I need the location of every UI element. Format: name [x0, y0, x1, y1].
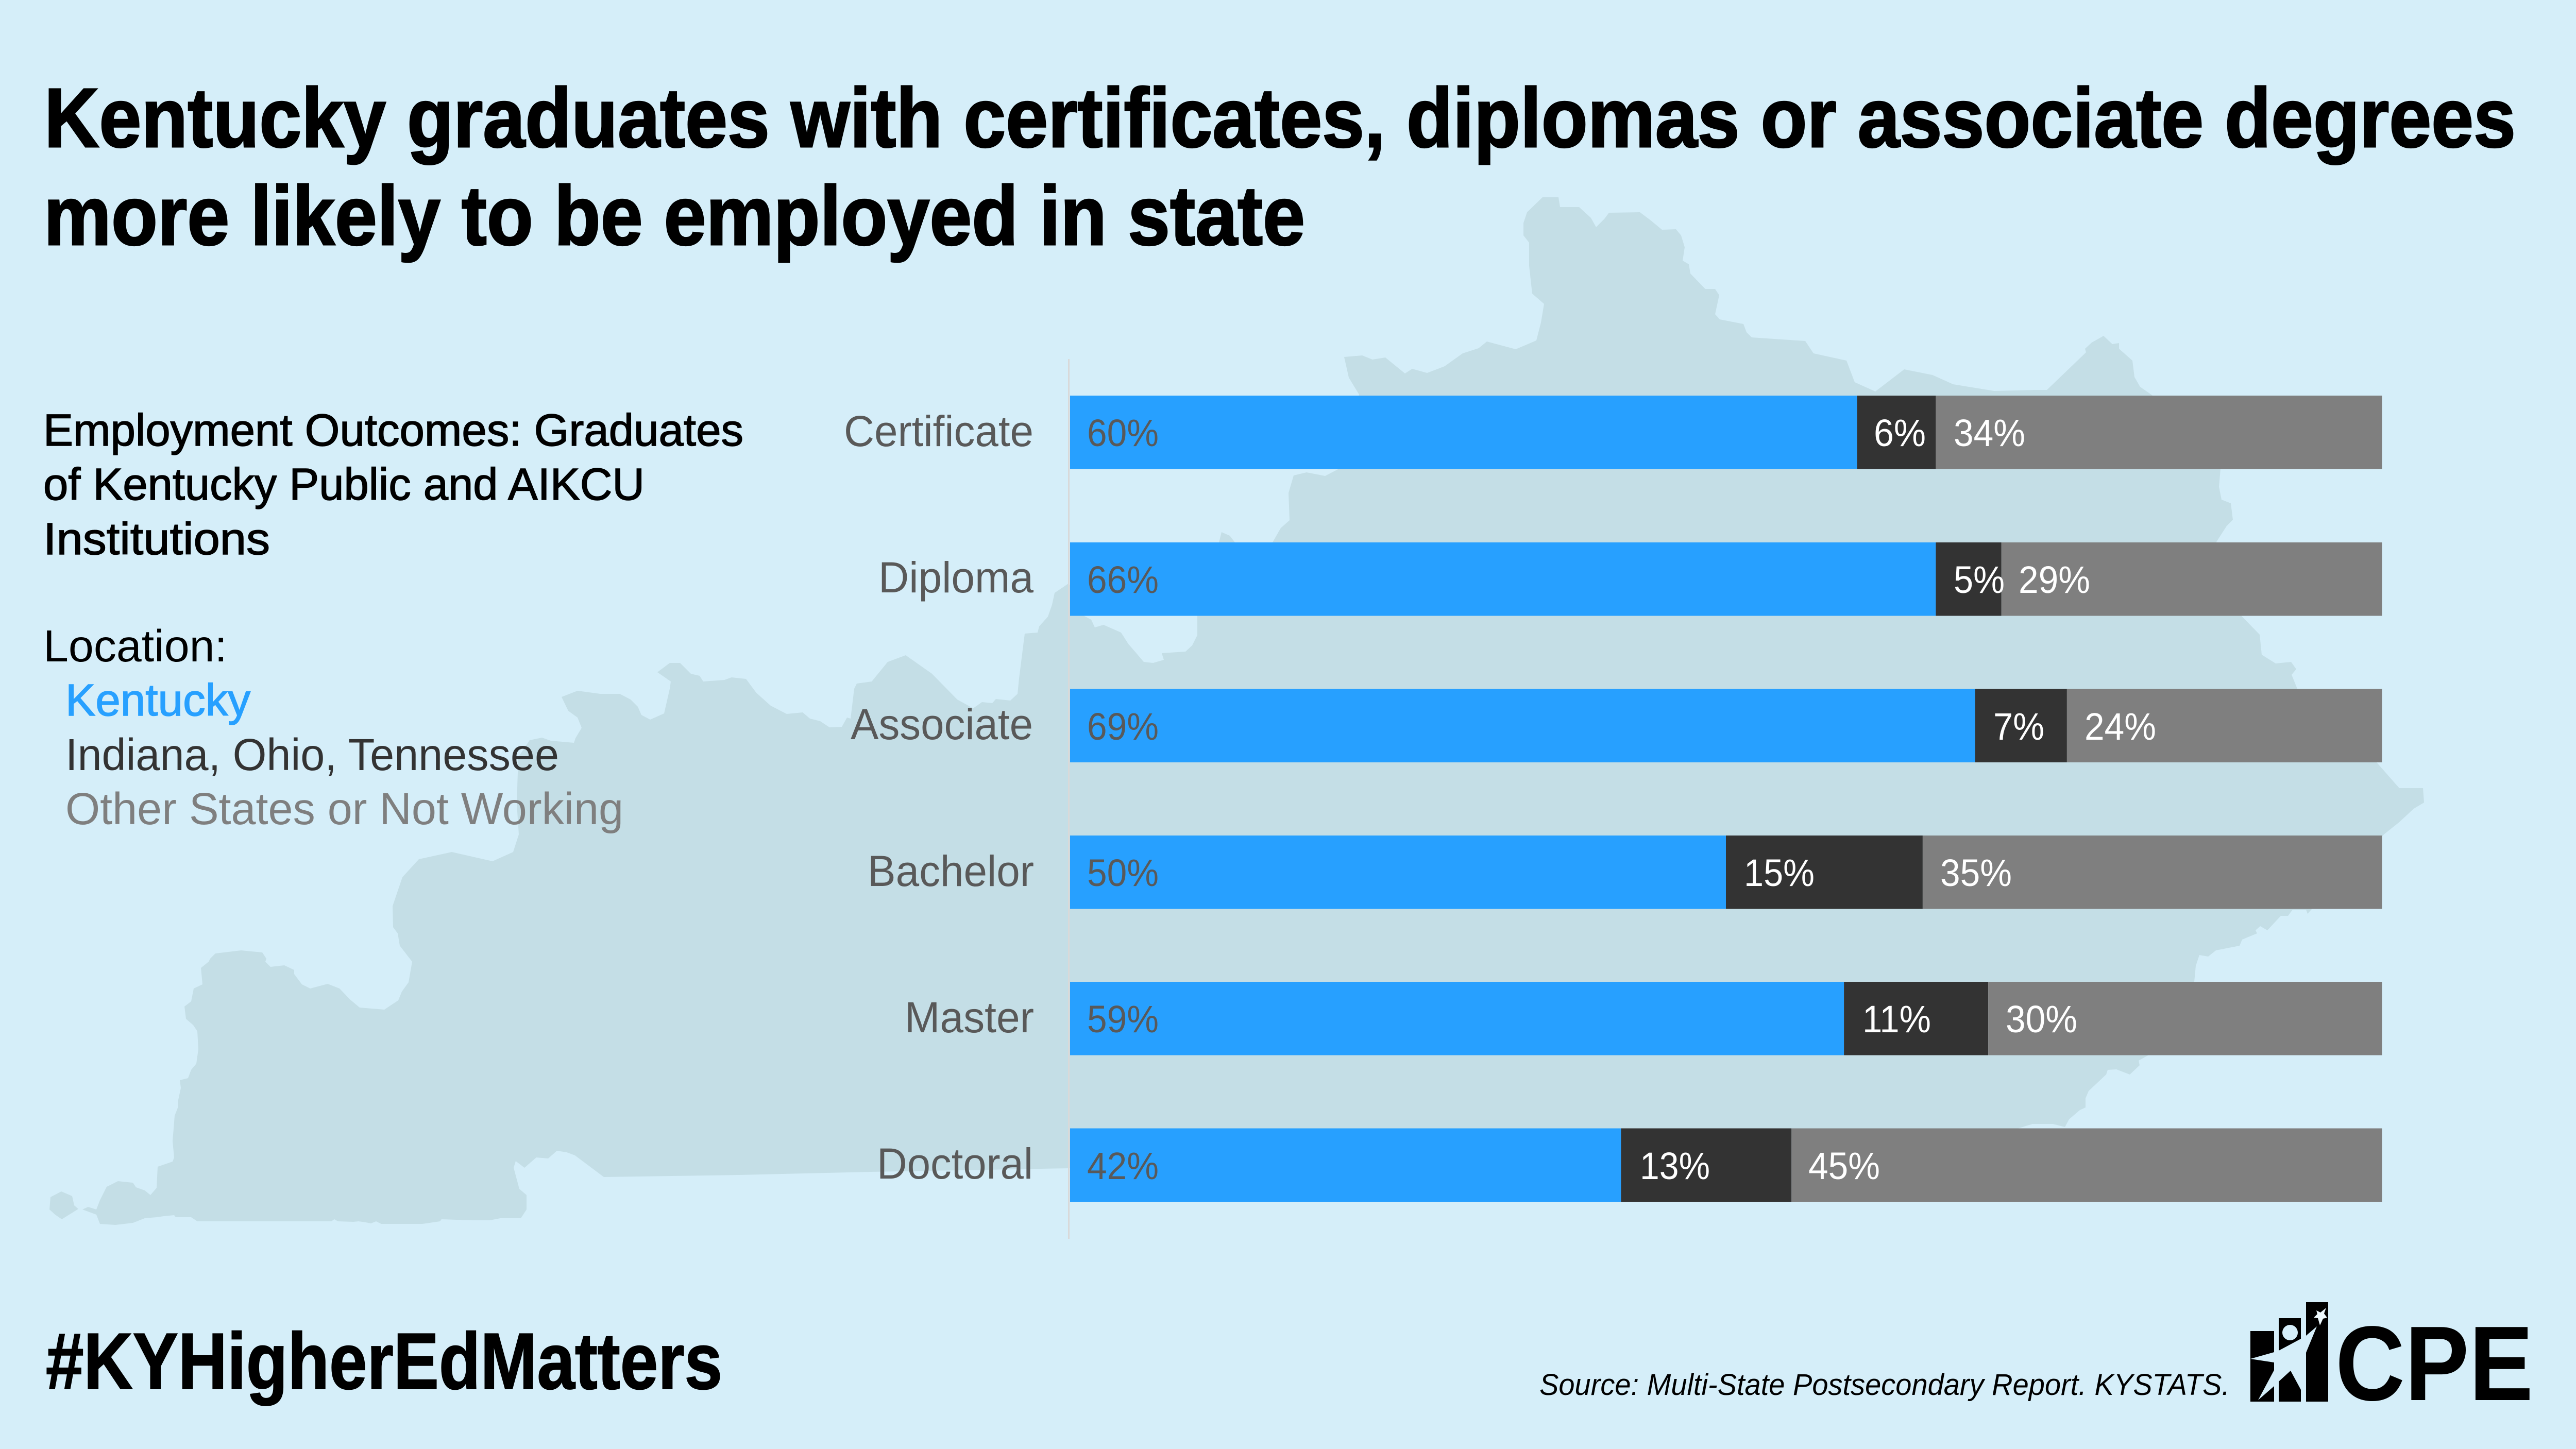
legend: location key: [43, 621, 623, 834]
row: Certificate: 60%: [1087, 412, 1159, 454]
row: Associate: 24%: [2084, 705, 2156, 748]
row: Certificate: 6%: [1874, 412, 1926, 454]
legend: location key: Other States or Not Working: [65, 784, 623, 834]
row: Bachelor: Bachelor: [868, 847, 1034, 895]
row: Bachelor: 50%: [1087, 851, 1159, 894]
row: Diploma: 5%: [1954, 558, 2005, 601]
row: Doctoral: 13%: [1640, 1145, 1710, 1187]
logo: CPE: [2250, 1302, 2533, 1423]
title: [44, 71, 2516, 263]
row: Doctoral: 42%: [1087, 1145, 1159, 1187]
logo: CPE: CPE: [2335, 1304, 2533, 1423]
row: Certificate: 34%: [1954, 412, 2025, 454]
legend: location key: Location:: [43, 621, 227, 671]
text block: chart description: of Kentucky Public and AIKCU: [43, 459, 645, 509]
row: Diploma: [878, 542, 2382, 616]
row: Bachelor: 15%: [1744, 851, 1815, 894]
row: Doctoral: Doctoral: [877, 1139, 1033, 1188]
row: Certificate: [844, 396, 2382, 469]
row: Master: [905, 982, 2382, 1055]
background map: Kentucky silhouette: [49, 197, 2424, 1225]
row: Master: 11%: [1862, 998, 1931, 1041]
row: Associate: [851, 689, 2382, 762]
hashtag: #KYHigherEdMatters: [46, 1317, 722, 1406]
row: Diploma: Diploma: [878, 553, 1033, 602]
source note: Source: Multi-State Postsecondary Report. KYSTATS.: [1539, 1368, 2230, 1402]
text block: chart description: [43, 405, 743, 564]
row: Master: Master: [905, 993, 1034, 1042]
row: Associate: Associate: [851, 700, 1033, 748]
row: Master: 59%: [1087, 998, 1159, 1041]
row: Doctoral: [877, 1128, 2382, 1202]
row: Doctoral: 45%: [1808, 1145, 1880, 1187]
row: Certificate: Certificate: [844, 407, 1033, 455]
row: Master: 30%: [2006, 998, 2077, 1041]
row: Diploma: 66%: [1087, 558, 1159, 601]
row: Associate: 7%: [1993, 705, 2044, 748]
icon: figure reaching for star: [2250, 1302, 2328, 1402]
legend: location key: Kentucky: [65, 675, 250, 725]
title: more likely to be employed in state: [44, 168, 1305, 263]
row: Diploma: 29%: [2019, 558, 2090, 601]
stacked bar chart: [844, 359, 2382, 1239]
text block: chart description: Institutions: [43, 514, 270, 564]
row: Bachelor: 35%: [1940, 851, 2012, 894]
legend: location key: Indiana, Ohio, Tennessee: [65, 730, 559, 780]
row: Bachelor: [868, 836, 2382, 909]
text block: chart description: Employment Outcomes: Graduates: [43, 405, 743, 455]
row: Associate: 69%: [1087, 705, 1159, 748]
